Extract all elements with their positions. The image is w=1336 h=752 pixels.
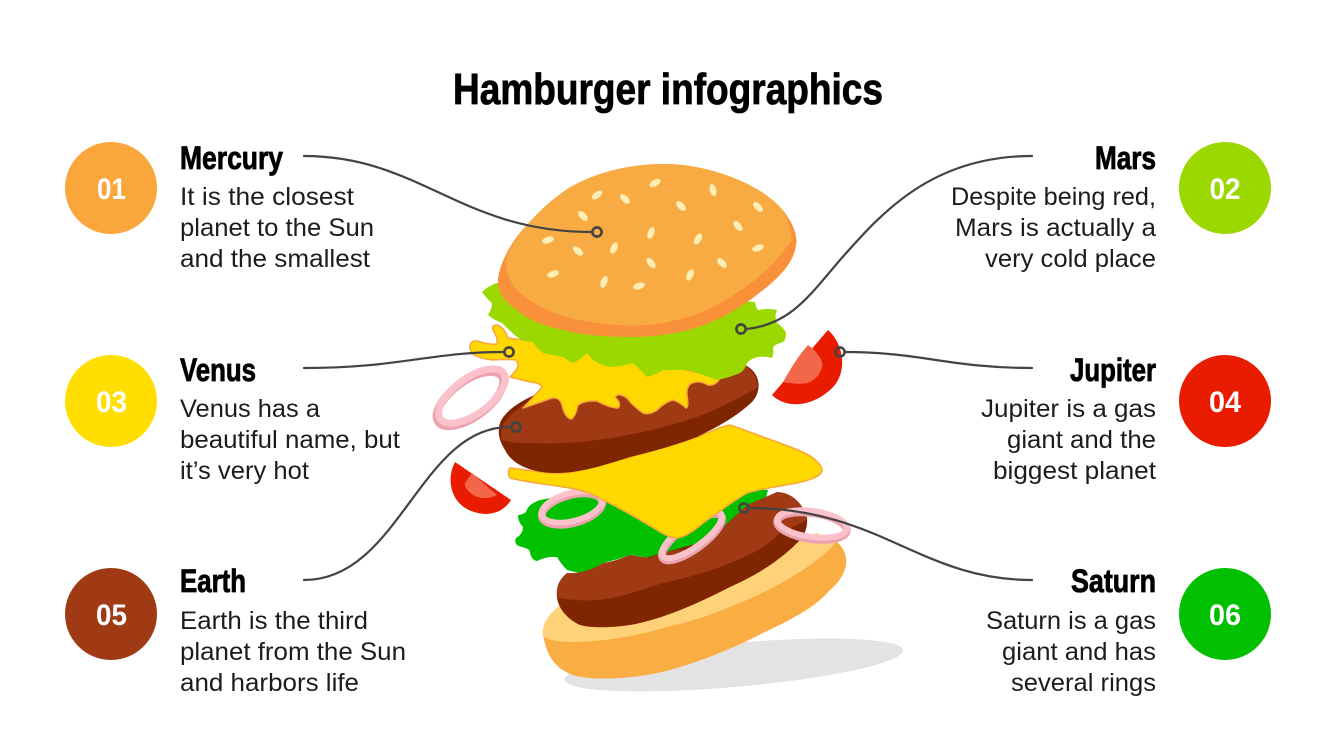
badge 05: 05 bbox=[96, 599, 127, 632]
text Venus: Venus has a bbox=[180, 395, 320, 423]
text Mercury bbox=[180, 183, 374, 273]
text Mercury: and the smallest bbox=[180, 245, 370, 273]
panel: Earth bbox=[65, 563, 406, 697]
onion ring left of lower stack bbox=[538, 485, 606, 531]
panel: Mercury bbox=[65, 140, 374, 273]
badge 01 bbox=[65, 142, 157, 234]
green lettuce bbox=[515, 480, 768, 573]
sesame seeds bbox=[541, 177, 765, 291]
upper patty bbox=[499, 365, 759, 473]
connector: Venus bbox=[304, 347, 514, 368]
bottom bun bbox=[543, 533, 846, 679]
shadow bbox=[563, 628, 905, 702]
panel: Venus bbox=[65, 352, 400, 485]
heading Saturn: Saturn bbox=[1071, 563, 1156, 599]
badge 06: 06 bbox=[1209, 599, 1241, 632]
text Earth: Earth is the third bbox=[180, 607, 368, 635]
text Jupiter: Jupiter is a gas bbox=[981, 395, 1156, 423]
text Saturn bbox=[986, 607, 1156, 697]
top bun bbox=[498, 164, 796, 337]
text Mars bbox=[951, 183, 1156, 273]
heading Earth: Earth bbox=[180, 563, 246, 599]
badge 04 bbox=[1179, 355, 1271, 447]
badge 05 bbox=[65, 568, 157, 660]
badge 02 bbox=[1179, 142, 1271, 234]
badge 03 bbox=[65, 355, 157, 447]
light green lettuce bbox=[482, 283, 786, 380]
text Saturn: Saturn is a gas bbox=[986, 607, 1156, 635]
title: Hamburger infographics bbox=[453, 65, 883, 114]
text Earth bbox=[180, 607, 406, 697]
text Venus: it’s very hot bbox=[180, 457, 309, 485]
tomato left bbox=[451, 462, 511, 514]
panel: Jupiter bbox=[981, 352, 1271, 485]
text Venus: beautiful name, but bbox=[180, 426, 400, 454]
text Jupiter bbox=[981, 395, 1156, 485]
text Mercury: planet to the Sun bbox=[180, 214, 374, 242]
badge 06 bbox=[1179, 568, 1271, 660]
text Earth: planet from the Sun bbox=[180, 638, 406, 666]
connector: Saturn bbox=[739, 503, 1032, 580]
connector: Jupiter bbox=[835, 347, 1032, 368]
heading Mercury: Mercury bbox=[180, 140, 283, 176]
heading Jupiter: Jupiter bbox=[1070, 352, 1156, 388]
heading Mars: Mars bbox=[1095, 140, 1156, 176]
text Jupiter: biggest planet bbox=[993, 457, 1156, 485]
connector: Earth bbox=[304, 422, 521, 580]
badge 03: 03 bbox=[96, 386, 127, 419]
onion ring centre bbox=[656, 504, 728, 568]
connector: Mars bbox=[736, 156, 1032, 334]
badge 04: 04 bbox=[1209, 386, 1241, 419]
melted cheese bbox=[470, 325, 720, 419]
heading Venus: Venus bbox=[180, 352, 256, 388]
badge 01: 01 bbox=[97, 173, 126, 206]
onion ring right bbox=[776, 506, 848, 544]
text Saturn: giant and has bbox=[1002, 638, 1156, 666]
connector: Mercury bbox=[304, 156, 602, 237]
text Jupiter: giant and the bbox=[1007, 426, 1156, 454]
text Mars: Mars is actually a bbox=[955, 214, 1156, 242]
panel: Mars bbox=[951, 140, 1271, 273]
onion ring floating bbox=[428, 359, 514, 436]
lower patty bbox=[557, 492, 807, 627]
badge 02: 02 bbox=[1210, 173, 1240, 206]
text Earth: and harbors life bbox=[180, 669, 359, 697]
text Mars: very cold place bbox=[985, 245, 1156, 273]
panel: Saturn bbox=[986, 563, 1271, 697]
cheese slice bbox=[508, 425, 822, 538]
text Venus bbox=[180, 395, 400, 485]
tomato right bbox=[772, 330, 842, 404]
hamburger illustration bbox=[428, 164, 905, 702]
text Mercury: It is the closest bbox=[180, 183, 354, 211]
text Mars: Despite being red, bbox=[951, 183, 1156, 211]
text Saturn: several rings bbox=[1011, 669, 1156, 697]
